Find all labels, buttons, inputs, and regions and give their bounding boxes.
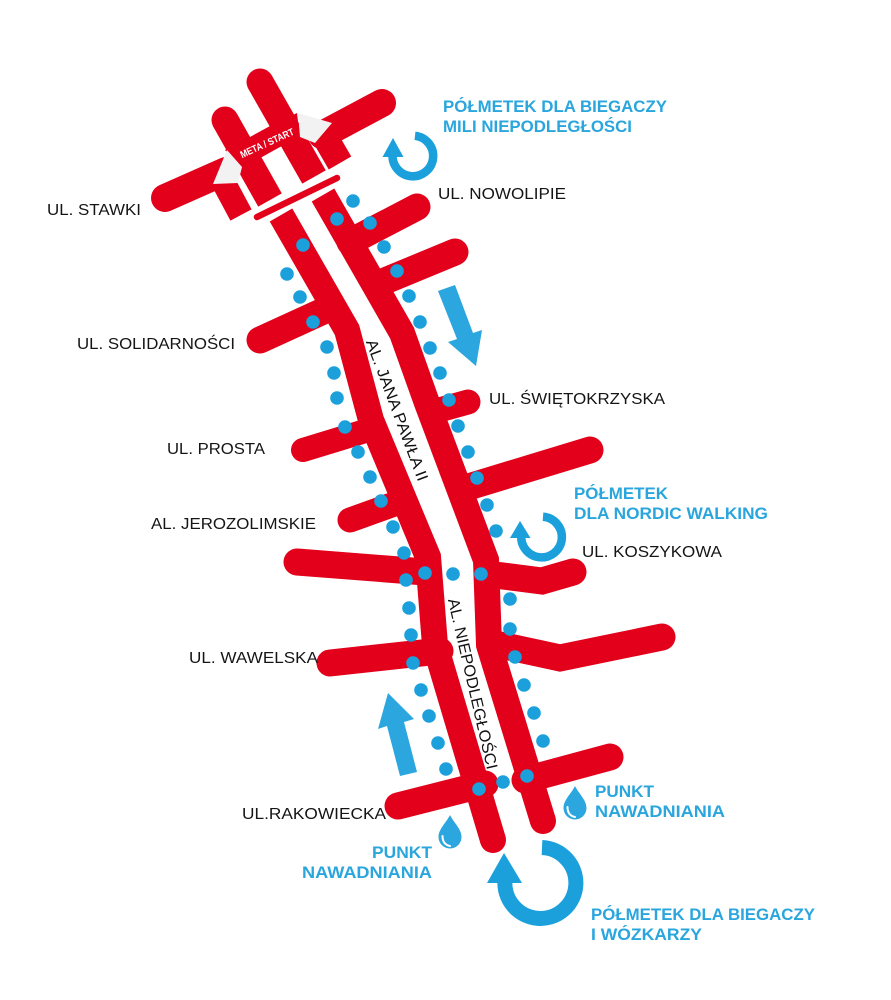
callout: water point right: NAWADNIANIA: [595, 803, 725, 821]
street labels: UL. SOLIDARNOŚCI: [77, 334, 235, 353]
start label: META / START: [239, 127, 296, 161]
route map: [165, 68, 662, 853]
right carriageway: [323, 195, 556, 834]
street labels: UL. PROSTA: [167, 441, 265, 458]
road label: Jana Pawła II: AL. JANA PAWŁA II: [362, 337, 430, 484]
callout: water point right: PUNKT: [595, 783, 654, 801]
callout: half-way runners mile: PÓŁMETEK DLA BIEGACZY: [443, 97, 667, 116]
icon: turnaround middle: [510, 517, 562, 557]
street labels: UL. WAWELSKA: [189, 650, 318, 667]
start arrows: [213, 113, 332, 184]
divider bar at start line: [257, 178, 337, 217]
callout: water point left: PUNKT: [372, 844, 432, 862]
left carriageway: [281, 215, 506, 853]
icon: turnaround bottom: [487, 848, 576, 918]
road label: Niepodległości: AL. NIEPODLEGŁOŚCI: [444, 596, 502, 771]
callout: water point left: [302, 844, 432, 882]
callout: half-way runners mile: [443, 97, 667, 136]
arrow: direction up: [378, 693, 417, 776]
callout: half-way nordic walking: DLA NORDIC WALKING: [574, 505, 768, 523]
cross streets: [260, 207, 662, 806]
start area streets: [165, 68, 382, 215]
callout: half-way runners and wheelchairs: I WÓZKARZY: [591, 925, 702, 944]
callout: water point right: [595, 783, 725, 821]
street labels: UL. NOWOLIPIE: [438, 186, 566, 203]
icon: turnaround top: [382, 136, 433, 176]
callout: half-way runners and wheelchairs: PÓŁMETEK DLA BIEGACZY: [591, 905, 815, 924]
callout: half-way nordic walking: [574, 484, 768, 523]
street labels: UL. ŚWIĘTOKRZYSKA: [489, 389, 665, 408]
route dots: [280, 194, 550, 796]
street labels: UL. STAWKI: [47, 202, 141, 219]
street labels: UL.RAKOWIECKA: [242, 806, 386, 823]
callout: half-way runners and wheelchairs: [591, 905, 815, 944]
callout: half-way runners mile: MILI NIEPODLEGŁOŚCI: [443, 117, 632, 136]
street labels: [47, 186, 722, 823]
icon: water drop left: [438, 815, 462, 848]
street labels: AL. JEROZOLIMSKIE: [151, 516, 316, 533]
arrow: direction down: [438, 285, 482, 366]
callout: water point left: NAWADNIANIA: [302, 864, 432, 882]
icon: water drop right: [564, 786, 586, 820]
street labels: UL. KOSZYKOWA: [582, 544, 722, 561]
callout: half-way nordic walking: PÓŁMETEK: [574, 484, 668, 503]
